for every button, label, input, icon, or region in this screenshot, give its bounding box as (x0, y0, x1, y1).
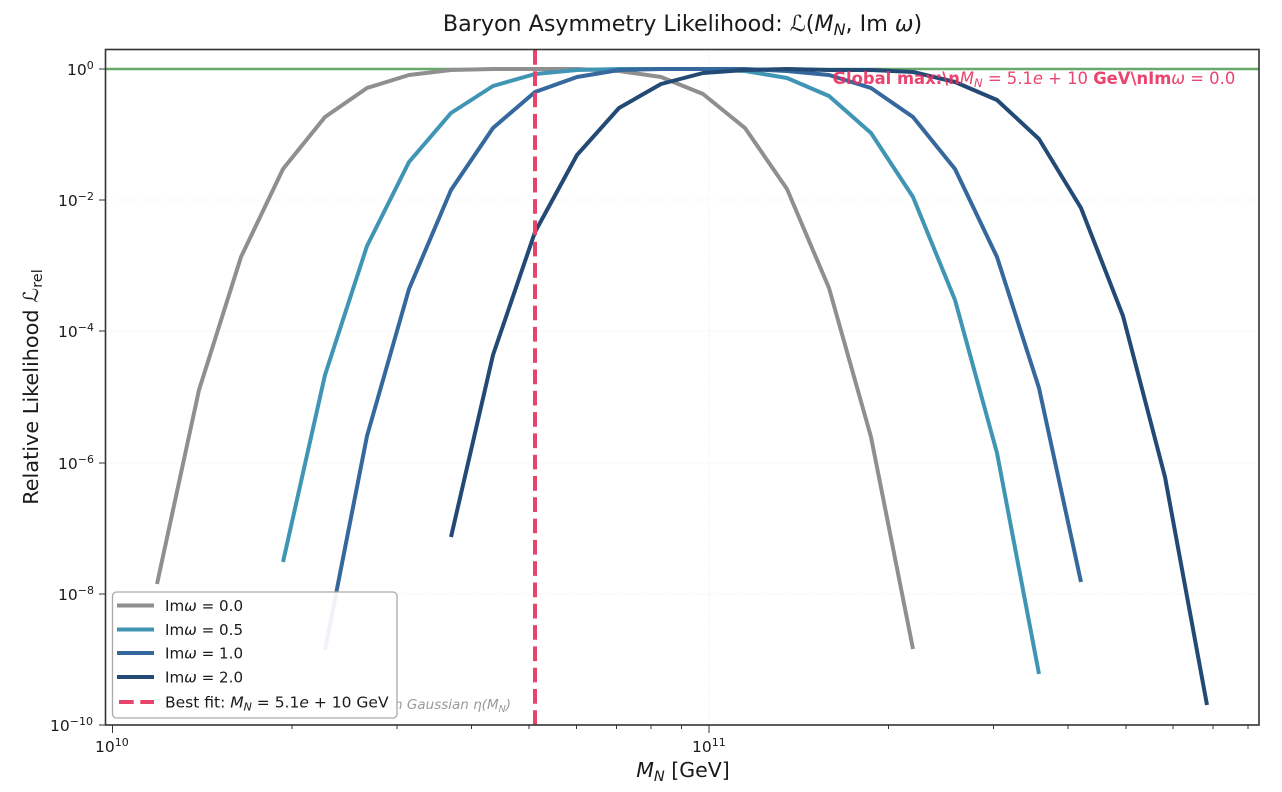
y axis ticks (99, 69, 105, 725)
x axis ticks (112, 725, 1248, 733)
y tick labels: −6 (78, 453, 94, 466)
hidden footnote text: N (499, 704, 506, 715)
hidden footnote text: ) (505, 697, 511, 713)
legend entry: Im omega 0.0: Imω = 0.0 (165, 597, 243, 615)
annotation: global maximum: N (974, 76, 983, 90)
legend entry: Im omega 2.0 (117, 668, 243, 686)
curve: Im omega 2.0 (451, 69, 1207, 705)
y tick labels: 10 (50, 717, 70, 735)
curve: Im omega 0.0 (157, 69, 913, 649)
x tick label 10^10: 10 (95, 738, 115, 756)
legend entry: Im omega 0.0 (117, 597, 243, 615)
legend entry: Im omega 0.5 (117, 621, 243, 639)
x tick label 10^10: 10 (115, 736, 129, 749)
y tick labels: −10 (70, 715, 93, 728)
legend entry: best fit: Best fit: M (165, 694, 244, 712)
y axis label: rel (30, 269, 46, 288)
title: , Im (846, 11, 895, 37)
hidden footnote text: N (258, 704, 265, 715)
best fit vertical line (533, 49, 537, 725)
annotation: global maximum: = 5.1 (983, 69, 1033, 88)
y tick labels: −8 (78, 584, 94, 597)
legend entry: Im omega 2.0: Imω = 2.0 (165, 668, 243, 686)
x tick label 10^11: 11 (712, 736, 726, 749)
y tick labels: 10 (58, 192, 78, 210)
y tick labels: −4 (78, 321, 94, 334)
title: Baryon Asymmetry Likelihood: ℒ(M (443, 11, 834, 37)
x tick label 10^11: 10 (692, 738, 712, 756)
annotation: global maximum: Global max:\nM (832, 69, 974, 88)
reference line: L = 1 (105, 68, 1259, 70)
y tick labels: 10 (58, 586, 78, 604)
curve: Im omega 0.5 (283, 69, 1039, 674)
x axis label: M (636, 758, 654, 782)
curve: Im omega 1.0 (325, 69, 1081, 650)
legend entry: best fit: e + 10 GeV (299, 694, 389, 712)
x axis label: [GeV] (665, 758, 730, 782)
y tick labels: 10 (67, 61, 87, 79)
legend entry: Im omega 1.0: Imω = 1.0 (165, 644, 243, 662)
legend entry: Im omega 0.5: Imω = 0.5 (165, 621, 243, 639)
y tick labels: 10 (58, 455, 78, 473)
title: ω) (895, 11, 922, 37)
y tick labels: 10 (58, 323, 78, 341)
legend entry: best fit (119, 694, 389, 714)
legend entry: best fit: N (244, 700, 252, 714)
axes frame (106, 50, 1259, 725)
y tick labels: 0 (87, 59, 94, 72)
annotation: global maximum: e + 10 GeV\nImω = 0.0 (1033, 69, 1235, 88)
x axis label: N (654, 769, 665, 785)
hidden footnote text: Toy model: ℒ(M (153, 697, 258, 713)
title: N (834, 20, 846, 39)
legend (112, 592, 397, 718)
legend entry: Im omega 1.0 (117, 644, 243, 662)
y tick labels: −2 (78, 190, 94, 203)
y tick labels (50, 59, 94, 735)
hidden footnote text: , Im ω) from ηB with Gaussian η(M (265, 697, 499, 713)
legend entry: best fit: = 5.1 (252, 694, 299, 712)
y axis label: Relative Likelihood ℒ (19, 288, 43, 505)
